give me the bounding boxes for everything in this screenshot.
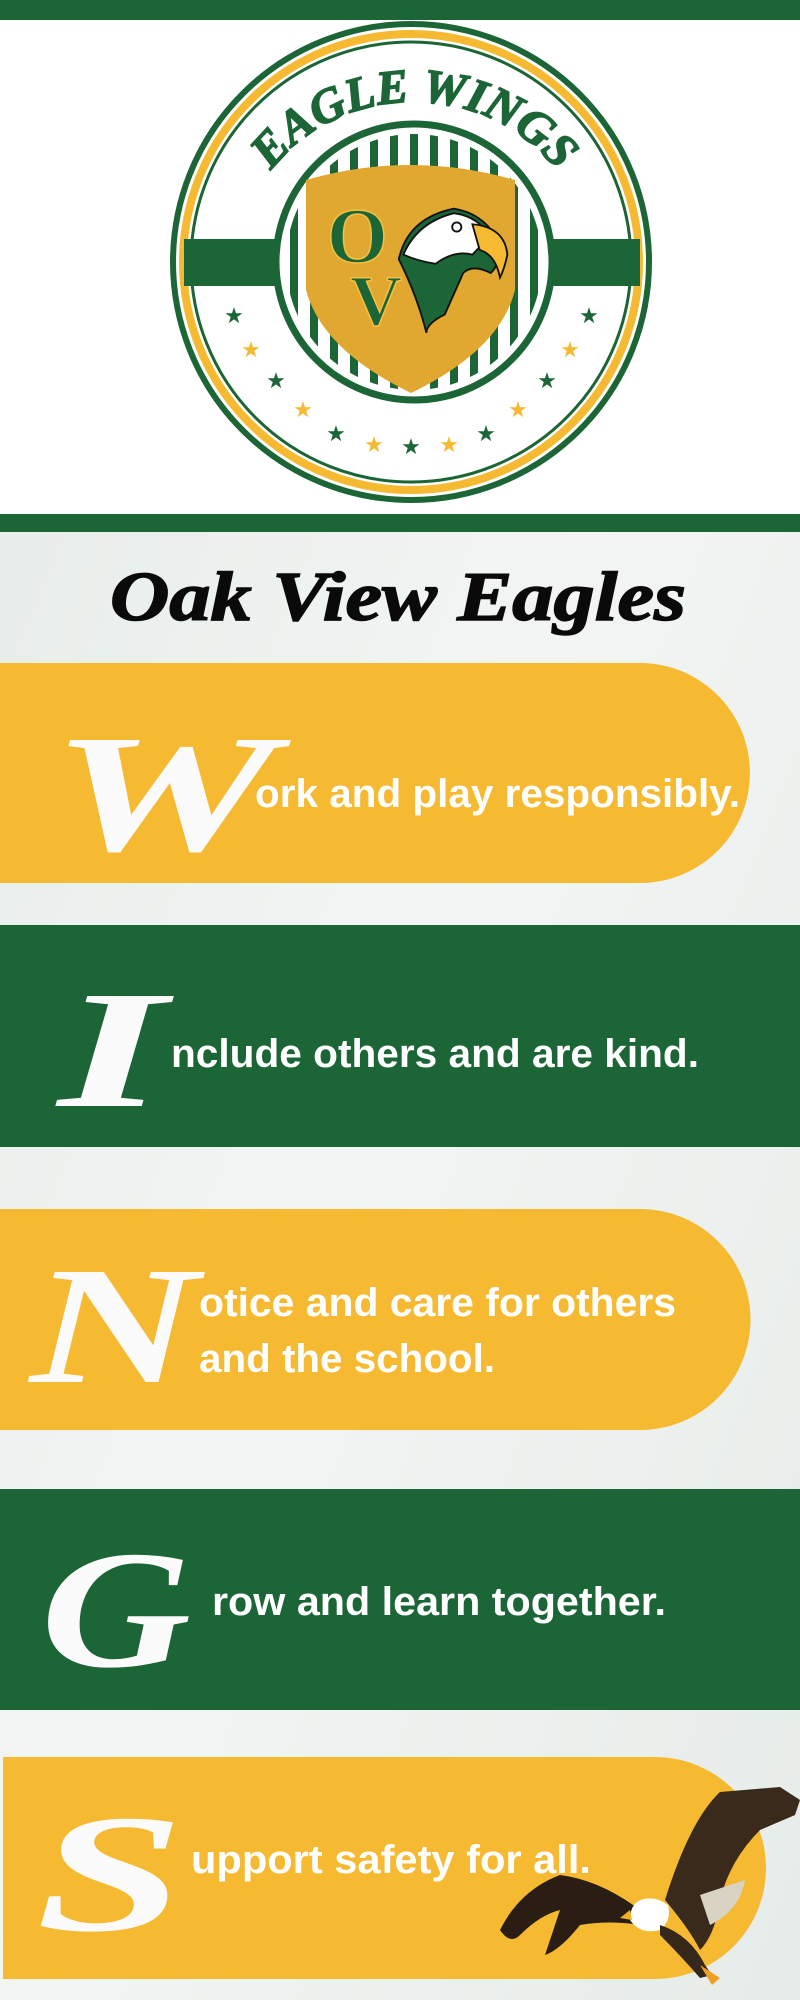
panel: I: nclude others and are kind. bbox=[171, 1032, 699, 1076]
logo: Eagle Wings badge: ★ bbox=[560, 338, 580, 363]
panel: G: G bbox=[41, 1517, 191, 1703]
logo: Eagle Wings badge: V bbox=[350, 261, 402, 341]
panel: N: and the school. bbox=[199, 1337, 495, 1381]
panel: N: otice and care for others bbox=[199, 1281, 676, 1325]
panel: I: I bbox=[55, 957, 175, 1143]
panel: W: W bbox=[51, 701, 292, 887]
logo: Eagle Wings badge: ★ bbox=[364, 433, 384, 458]
panel: G bbox=[0, 1489, 800, 1710]
logo: Eagle Wings badge: ★ bbox=[508, 398, 528, 423]
logo: Eagle Wings badge: ★ bbox=[241, 338, 261, 363]
logo: Eagle Wings badge: ★ bbox=[293, 398, 313, 423]
logo: Eagle Wings badge: ★ bbox=[224, 304, 244, 329]
panel: W bbox=[0, 663, 750, 887]
title: Oak View Eagles bbox=[110, 559, 686, 636]
logo: Eagle Wings badge: EAGLE WINGS bbox=[250, 70, 580, 172]
logo: Eagle Wings badge: ★ bbox=[476, 422, 496, 447]
logo: Eagle Wings badge: ★ bbox=[579, 304, 599, 329]
icon: flying bald eagle bbox=[500, 1787, 800, 1985]
logo: Eagle Wings badge: ★ bbox=[537, 369, 557, 394]
panel: S: upport safety for all. bbox=[191, 1838, 591, 1882]
panel: S: S bbox=[36, 1781, 184, 1967]
panel: N bbox=[0, 1209, 750, 1430]
logo: Eagle Wings badge: ★ bbox=[326, 422, 346, 447]
logo: Eagle Wings badge: O bbox=[327, 192, 388, 279]
panel: N: N bbox=[27, 1233, 206, 1419]
logo: Eagle Wings badge: ★ bbox=[439, 433, 459, 458]
header: logo panel bbox=[0, 0, 800, 532]
logo: Eagle Wings badge: ★ bbox=[266, 369, 286, 394]
panel: W: ork and play responsibly. bbox=[255, 772, 740, 816]
panel: I bbox=[0, 925, 800, 1147]
panel: S bbox=[3, 1757, 766, 1979]
logo: Eagle Wings badge bbox=[170, 21, 652, 503]
logo: Eagle Wings badge: ★ bbox=[401, 435, 421, 460]
icon: eagle head bbox=[399, 209, 507, 333]
panel: G: row and learn together. bbox=[212, 1580, 666, 1624]
